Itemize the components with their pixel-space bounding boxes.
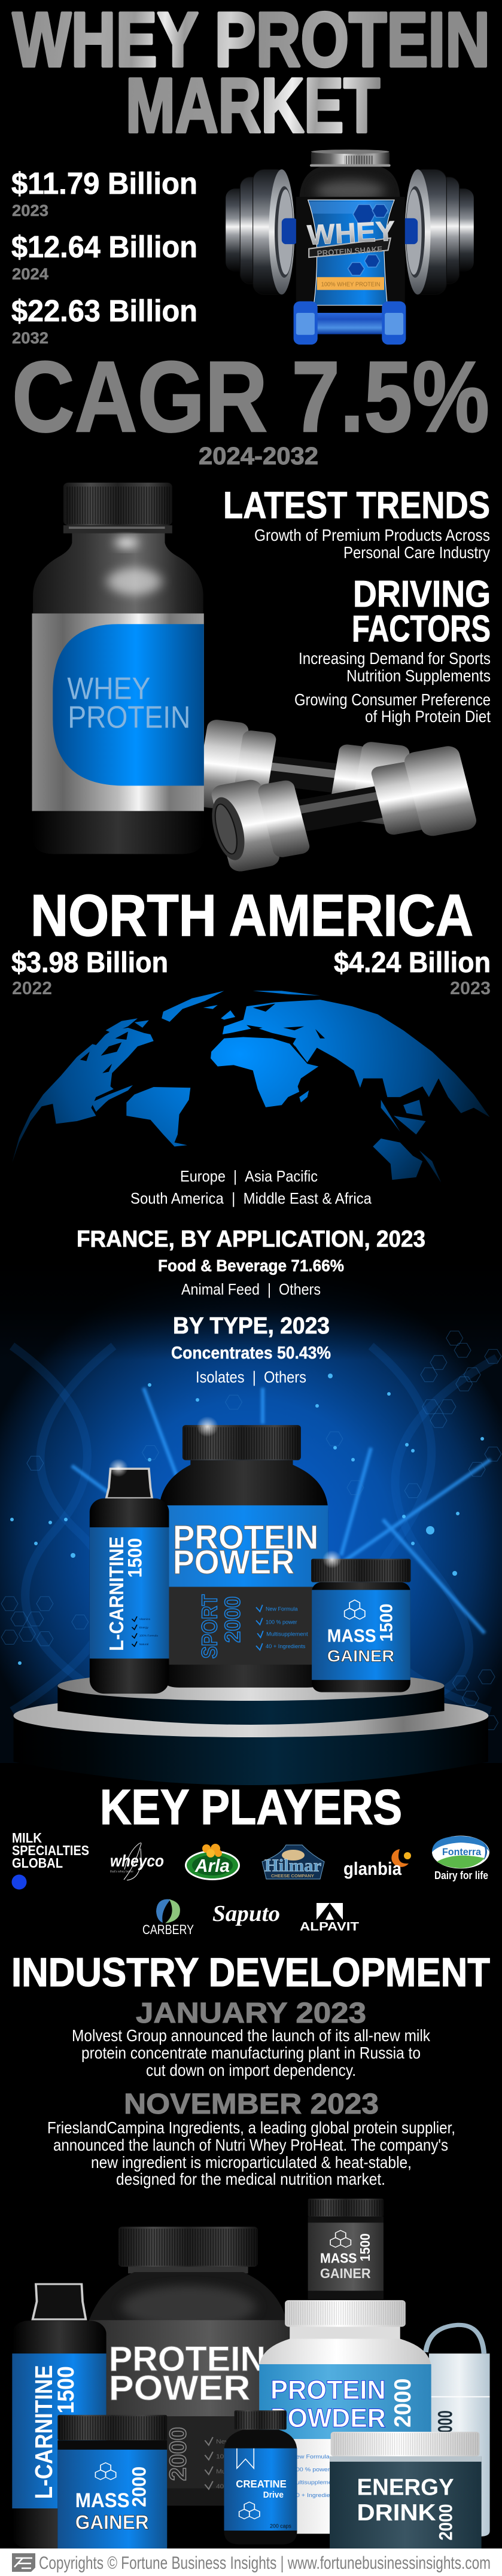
- heading: key players: KEY PLAYERS: [100, 1779, 402, 1835]
- jar: protein power: [159, 1425, 328, 1688]
- logo: Hilmar: [262, 1845, 324, 1879]
- logo: Milk Specialties Global: [12, 1830, 89, 1889]
- logo: Alpavit: [300, 1903, 359, 1933]
- market size values: $11.79 Billion: [11, 166, 197, 200]
- driving factors: [294, 574, 491, 726]
- bottle: L-carnitine: L-CARNITINE: [105, 1536, 127, 1651]
- jar: protein power grey: New: [216, 2438, 230, 2445]
- jar: protein power: SPORT: [197, 1594, 222, 1658]
- icon: Fortune Business Insights logo: [12, 2553, 35, 2572]
- logo: Milk Specialties Global: GLOBAL: [12, 1855, 63, 1871]
- regional values: $3.98 Billion: [11, 947, 168, 979]
- regional values: 2022: [12, 978, 52, 998]
- logo: Milk Specialties Global: MILK: [12, 1830, 42, 1846]
- logo: Fonterra: Fonterra: [442, 1846, 482, 1858]
- bottle: protein powder: 2000: [390, 2379, 416, 2428]
- jar: protein power grey: PROTEIN: [109, 2340, 266, 2379]
- other regions: South America | Middle East & Africa: [130, 1189, 372, 1207]
- product podium illustration: [90, 1416, 410, 1694]
- footer: [0, 2548, 502, 2576]
- bottle: protein powder: [259, 2300, 431, 2534]
- development: November 2023: new ingredient is microparticulated & heat-stable,: [91, 2153, 412, 2172]
- heading: by type: BY TYPE, 2023: [173, 1313, 330, 1339]
- development: November 2023: announced the launch of Nutri Whey ProHeat. The company's: [53, 2136, 448, 2154]
- icon: whey tub with dumbbells: 100% WHEY PROTEIN: [321, 282, 381, 288]
- jar: protein power grey: Mu: [216, 2468, 226, 2475]
- development: January 2023: protein concentrate manufacturing plant in Russia to: [81, 2044, 421, 2062]
- bottle: L-carnitine: [12, 2284, 107, 2548]
- other regions: Europe | Asia Pacific: [180, 1167, 318, 1185]
- jar: mass gainer 2000: MASS: [75, 2489, 130, 2511]
- bottle: creatine: CREATINE: [236, 2478, 287, 2490]
- panel: blue science background: [0, 1259, 502, 1763]
- development: January 2023: JANUARY 2023: [136, 1998, 366, 2029]
- market size values: 2024: [12, 265, 48, 283]
- icon: whey protein bottle: PROTEIN: [68, 700, 190, 735]
- jar: mass gainer 1500: 1500: [377, 1604, 397, 1642]
- shaker: 2000: [433, 2410, 457, 2440]
- icon: whey tub with dumbbells: PROTEIN SHAKE: [317, 245, 383, 258]
- heading: France by application: [77, 1226, 425, 1298]
- jar: protein power grey: [89, 2227, 290, 2506]
- market size values: [11, 166, 197, 347]
- logo: Arla: Arla: [194, 1855, 230, 1876]
- jar: energy drink: 2000: [436, 2504, 457, 2541]
- jar: protein power: New Formula: [266, 1606, 298, 1612]
- bottle: protein powder: 00 % power: [296, 2467, 330, 2473]
- logo: Hilmar: CHEESE COMPANY: [271, 1874, 314, 1878]
- jar: mass gainer 1500: MASS: [327, 1625, 376, 1646]
- jar: protein power grey: 40: [216, 2483, 224, 2490]
- jar: mass gainer 1500: [311, 1559, 410, 1692]
- logo: Arla: [185, 1844, 240, 1880]
- jar: mass gainer grey: GAINER: [320, 2266, 371, 2281]
- other regions: [130, 1167, 372, 1207]
- bottle: protein powder: ultisupplement: [296, 2480, 337, 2486]
- title: MARKET: [126, 62, 380, 148]
- jar: protein power: 2000: [220, 1596, 245, 1643]
- jar: protein power: POWER: [173, 1544, 294, 1581]
- jar: mass gainer grey: 1500: [357, 2233, 373, 2261]
- bottle: creatine: 200 caps: [270, 2523, 291, 2529]
- bottle: creatine: [224, 2410, 297, 2544]
- bottle: L-carnitine: Natural: [139, 1643, 148, 1646]
- icon: whey tub with dumbbells: [226, 150, 474, 345]
- regional values: [11, 947, 491, 998]
- bottle: creatine: Drive: [263, 2490, 284, 2500]
- market size values: $22.63 Billion: [11, 294, 197, 328]
- jar: protein power: Multisupplement: [266, 1631, 308, 1637]
- shaker: [426, 2325, 490, 2537]
- heading: France by application: FRANCE, BY APPLICATION, 2023: [77, 1226, 425, 1252]
- logo: glanbia: glanbia: [343, 1858, 402, 1879]
- jar: mass gainer 2000: GAINER: [75, 2511, 149, 2534]
- regional values: 2023: [450, 978, 491, 998]
- logo: wheyco: [110, 1843, 164, 1880]
- development: January 2023: [72, 1998, 431, 2079]
- icon: dumbbells behind bottle: [194, 718, 479, 874]
- jar: protein power: 100 % power: [266, 1618, 297, 1625]
- logo: Fonterra: [432, 1835, 489, 1881]
- jar: protein power grey: 100: [216, 2453, 228, 2460]
- development: November 2023: [47, 2088, 455, 2188]
- bottle: protein powder: POWDER: [270, 2403, 386, 2433]
- jar: protein power grey: POWER: [109, 2368, 250, 2407]
- logo: wheyco: that's whey better: [110, 1870, 133, 1874]
- sparkles: [109, 1416, 342, 1569]
- product range illustration: [12, 2199, 490, 2548]
- market size values: $12.64 Billion: [11, 230, 197, 264]
- logo: Carbery: CARBERY: [142, 1922, 194, 1937]
- development: January 2023: cut down on import dependency.: [146, 2061, 356, 2079]
- jar: energy drink: ENERGY: [357, 2474, 454, 2501]
- jar: energy drink: [330, 2432, 482, 2548]
- development: January 2023: Molvest Group announced the launch of its all-new milk: [72, 2026, 431, 2045]
- logos: key players: [12, 1830, 489, 1937]
- market size values: 2023: [12, 202, 48, 220]
- jar: mass gainer 2000: 2000: [129, 2467, 150, 2507]
- logo: glanbia: [343, 1849, 411, 1879]
- bottle: L-carnitine: [90, 1469, 169, 1694]
- title: [13, 0, 490, 148]
- logo: Carbery: [142, 1899, 194, 1937]
- logo: Hilmar: Hilmar: [264, 1856, 321, 1875]
- logo: Fonterra: Dairy for life: [434, 1869, 488, 1881]
- heading: France by application: Animal Feed | Others: [181, 1280, 321, 1298]
- heading: France by application: Food & Beverage 71.66%: [158, 1256, 344, 1275]
- jar: mass gainer grey: [308, 2199, 384, 2299]
- icon: whey tub with dumbbells: WHEY: [306, 215, 396, 251]
- bottle: L-carnitine: Vitamins: [139, 1618, 151, 1621]
- bottle: protein powder: ew Formula: [296, 2454, 330, 2460]
- development: November 2023: NOVEMBER 2023: [124, 2088, 379, 2120]
- logo: Alpavit: ALPAVIT: [300, 1920, 359, 1933]
- CAGR: 2024-2032: [199, 442, 318, 470]
- icon: whey protein bottle: WHEY: [67, 671, 150, 706]
- bottle: L-carnitine: L-CARNITINE: [30, 2365, 57, 2499]
- heading: by type: Concentrates 50.43%: [171, 1344, 331, 1363]
- logo: Milk Specialties Global: SPECIALTIES: [12, 1843, 89, 1858]
- jar: protein power grey: 2000: [165, 2427, 191, 2481]
- bottle: L-carnitine: 100% Formula: [139, 1634, 158, 1637]
- latest trends: [223, 485, 490, 562]
- development: November 2023: designed for the medical nutrition market.: [116, 2170, 385, 2188]
- jar: protein power: PROTEIN: [173, 1519, 318, 1556]
- jar: mass gainer 1500: GAINER: [327, 1646, 394, 1665]
- icon: whey protein bottle: [32, 483, 204, 854]
- podium: [13, 1671, 488, 1785]
- jar: protein power: 40 + Ingredients: [266, 1643, 306, 1649]
- bottle: protein powder: PROTEIN: [270, 2375, 386, 2405]
- bottle: L-carnitine: 1500: [53, 2366, 79, 2414]
- jar: mass gainer grey: MASS: [320, 2251, 357, 2266]
- bottle: protein powder: 0 + Ingredients: [296, 2493, 339, 2499]
- jar: mass gainer 2000: [57, 2415, 167, 2548]
- market size values: 2032: [12, 329, 48, 347]
- logo: Saputo: Saputo: [212, 1901, 280, 1926]
- heading: by type: Isolates | Others: [196, 1368, 306, 1386]
- heading: by type: [171, 1313, 331, 1386]
- jar: energy drink: DRINK: [357, 2500, 436, 2526]
- regional values: $4.24 Billion: [334, 947, 491, 979]
- logo: wheyco: wheyco: [110, 1852, 164, 1870]
- bottle: L-carnitine: Energy: [139, 1626, 149, 1629]
- bottle: L-carnitine: 1500: [124, 1538, 146, 1578]
- map: blue globe: [12, 991, 490, 1183]
